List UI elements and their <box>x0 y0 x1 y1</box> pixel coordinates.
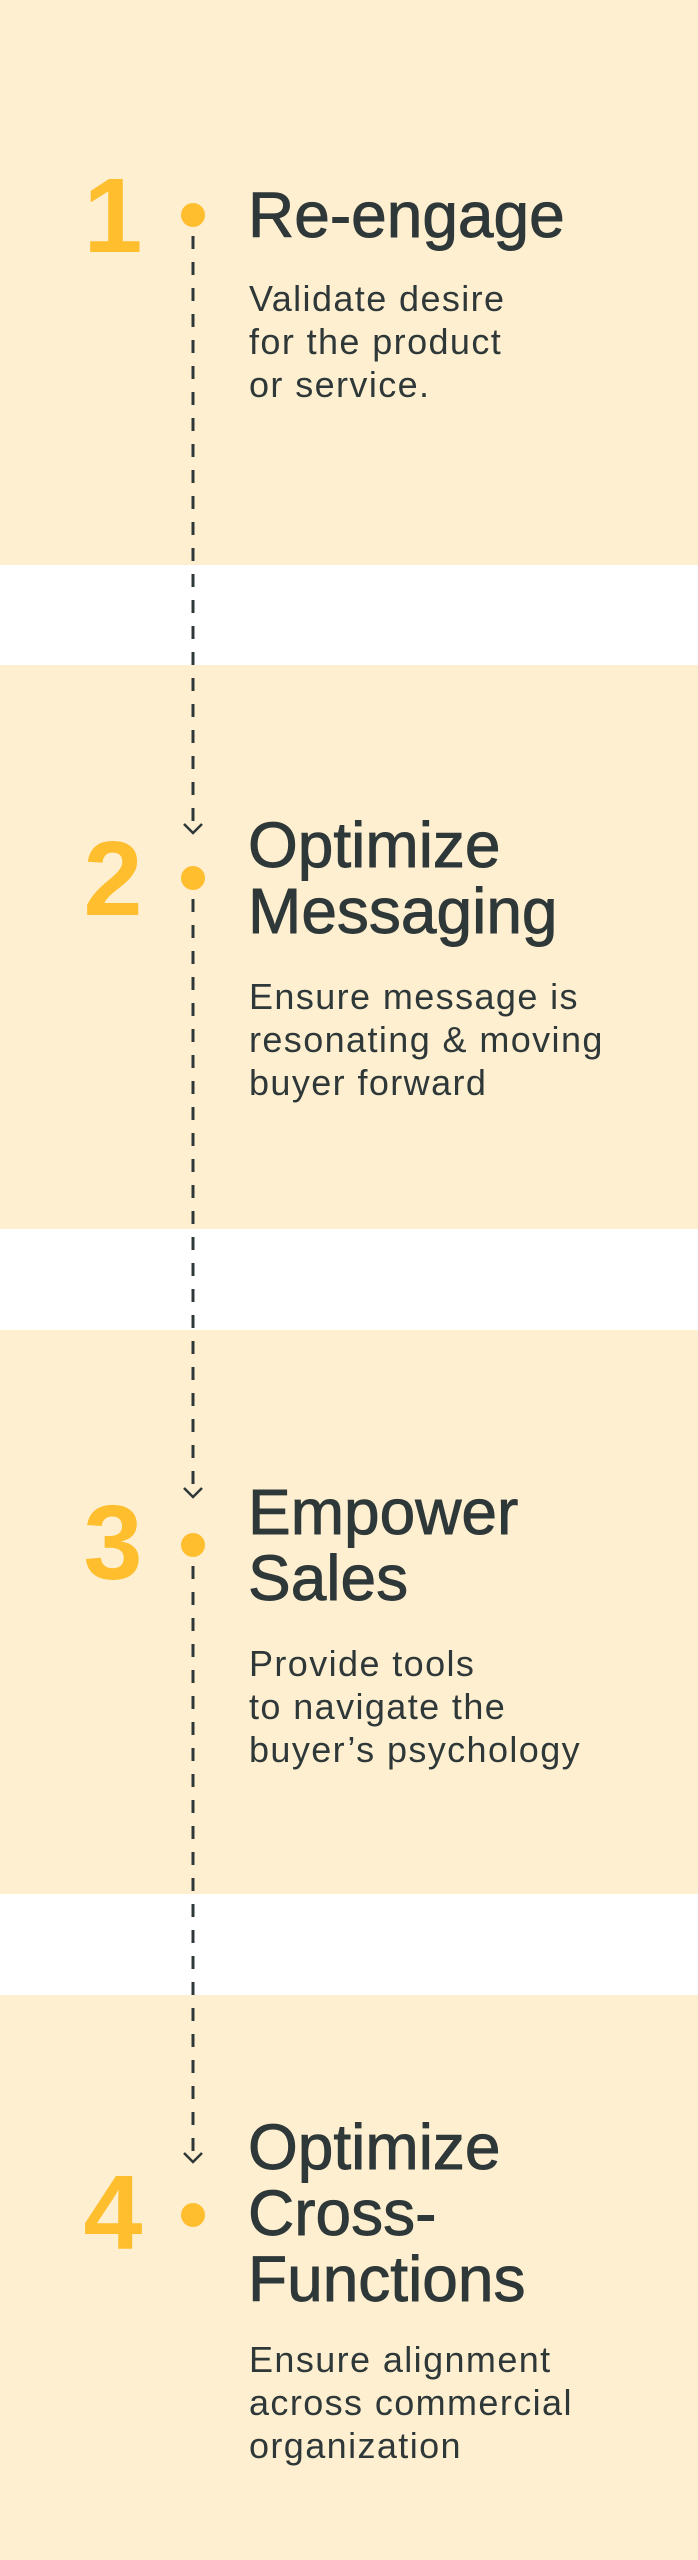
body 2: Ensure message is <box>249 976 579 1017</box>
title 4 <box>248 2111 525 2315</box>
panel: step 4 <box>0 1995 698 2560</box>
body 2 <box>249 976 604 1103</box>
body 2: resonating & moving <box>249 1019 604 1060</box>
body 3: buyer’s psychology <box>249 1729 581 1770</box>
body 3: Provide tools <box>249 1643 475 1684</box>
panel: step 3 <box>0 1330 698 1894</box>
title 2: Messaging <box>248 875 558 947</box>
number 4: 4 <box>84 2154 142 2272</box>
body 1: or service. <box>249 364 430 405</box>
panel: step 2 <box>0 665 698 1229</box>
body 4 <box>249 2339 573 2466</box>
body 1 <box>249 278 505 405</box>
body 2: buyer forward <box>249 1062 487 1103</box>
title 3: Empower <box>248 1476 518 1548</box>
title 3 <box>248 1476 518 1614</box>
body 4: organization <box>249 2425 462 2466</box>
number 1: 1 <box>84 157 142 275</box>
number 2: 2 <box>84 820 142 938</box>
title 2: Optimize <box>248 809 500 881</box>
body 1: Validate desire <box>249 278 505 319</box>
title 4: Functions <box>248 2243 525 2315</box>
title 1: Re-engage <box>248 179 565 251</box>
body 3: to navigate the <box>249 1686 506 1727</box>
number 3: 3 <box>84 1484 142 1602</box>
title 3: Sales <box>248 1542 408 1614</box>
title 4: Optimize <box>248 2111 500 2183</box>
title 2 <box>248 809 558 947</box>
panel: step 1 <box>0 0 698 565</box>
body 4: across commercial <box>249 2382 573 2423</box>
body 4: Ensure alignment <box>249 2339 552 2380</box>
body 1: for the product <box>249 321 502 362</box>
title 4: Cross- <box>248 2177 436 2249</box>
body 3 <box>249 1643 581 1770</box>
